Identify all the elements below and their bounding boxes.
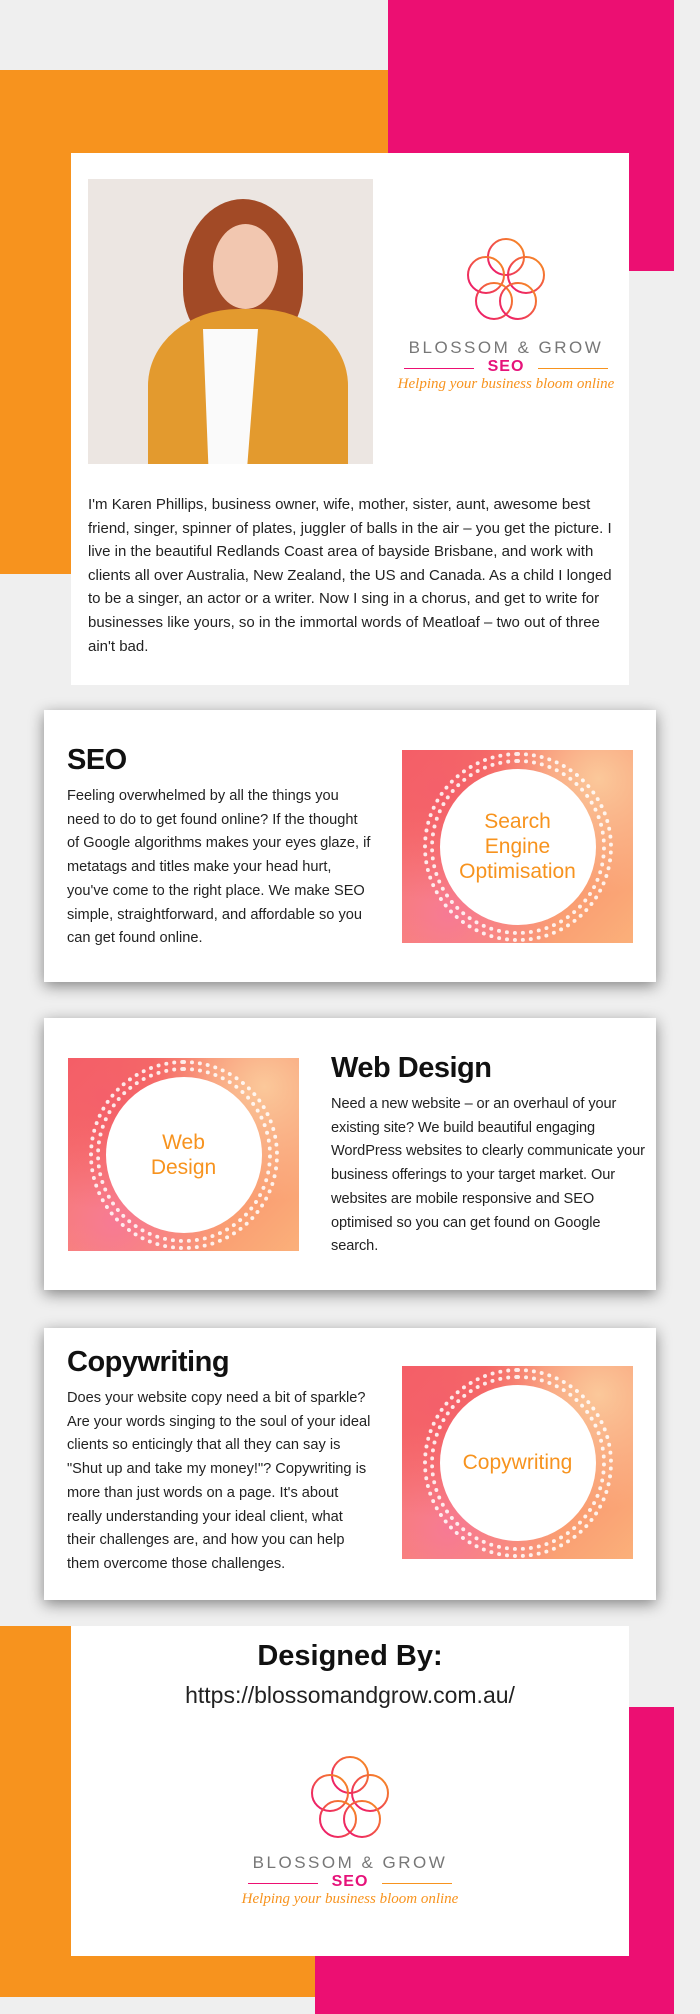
logo text: Helping your business bloom online [398, 376, 614, 392]
text: Web Design: Need a new website – or an overhaul of your existing site? We build beautiful engaging WordPress websites to clearly communicate your business offerings to your target market. Our websites are mobile responsive and SEO optimised so you can get found on Google search. [331, 1096, 645, 1254]
logo text: Helping your business bloom online [242, 1891, 458, 1907]
icon: flower [467, 238, 545, 320]
panel: Web Design [44, 1018, 656, 1290]
logo text: BLOSSOM & GROW [409, 338, 603, 357]
image: Search Engine Optimisation: Engine [485, 835, 550, 858]
orange block top [0, 70, 388, 574]
logo text [242, 1853, 458, 1907]
image: Copywriting: Copywriting [463, 1451, 572, 1474]
pink block top [388, 0, 674, 271]
panel: designed by [71, 1626, 629, 1956]
icon: flower [311, 1756, 389, 1838]
text: bio: I'm Karen Phillips, business owner, wife, mother, sister, aunt, awesome best friend, singer, spinner of plates, juggler of balls in the air – you get the picture. I live in the beautiful Redlands Coast area of bayside Brisbane, and work with clients all over Australia, New Zealand, the US and Canada. As a child I longed to be a singer, an actor or a writer. Now I sing in a chorus, and get to write for businesses like yours, so in the immortal words of Meatloaf – two out of three ain't bad. [88, 496, 612, 655]
text: Copywriting: Does your website copy need a bit of sparkle? Are your words singing to the soul of your ideal clients so enticingly that all they can say is "Shut up and take my money!"? Copywriting is more than just words on a page. It's about really understanding your ideal client, what their challenges are, and how you can help them overcome those challenges. [67, 1390, 370, 1572]
logo text: SEO [488, 358, 524, 375]
image: Search Engine Optimisation: Optimisation [459, 860, 576, 883]
text: SEO: Feeling overwhelmed by all the things you need to do to get found online? If the thought of Google algorithms makes your eyes glaze, if metatags and titles make your head hurt, you've come to the right place. We make SEO simple, straightforward, and affordable so you can get found online. [67, 788, 370, 946]
text: url: https://blossomandgrow.com.au/ [185, 1682, 515, 1708]
logo [398, 238, 614, 392]
heading: designed by: Designed By: [257, 1640, 443, 1672]
image: Search Engine Optimisation: Search [484, 810, 551, 833]
logo bottom [242, 1756, 458, 1907]
heading: SEO: SEO [67, 744, 127, 776]
heading: Copywriting: Copywriting [67, 1346, 229, 1378]
panel: about [71, 153, 629, 685]
image: Search Engine Optimisation [402, 750, 633, 943]
panel: SEO [44, 710, 656, 982]
image: Copywriting [402, 1366, 633, 1559]
pink block bottom [315, 1707, 674, 2014]
logo text: BLOSSOM & GROW [253, 1853, 447, 1872]
photo [88, 179, 373, 464]
image: Web Design [68, 1058, 299, 1251]
orange block bottom [0, 1626, 316, 1997]
logo text: SEO [332, 1873, 368, 1890]
image: Web Design: Design [151, 1156, 216, 1178]
image: Web Design: Web [162, 1130, 205, 1154]
panel: Copywriting [44, 1328, 656, 1600]
logo text [398, 338, 614, 392]
heading: Web Design: Web Design [331, 1052, 491, 1084]
